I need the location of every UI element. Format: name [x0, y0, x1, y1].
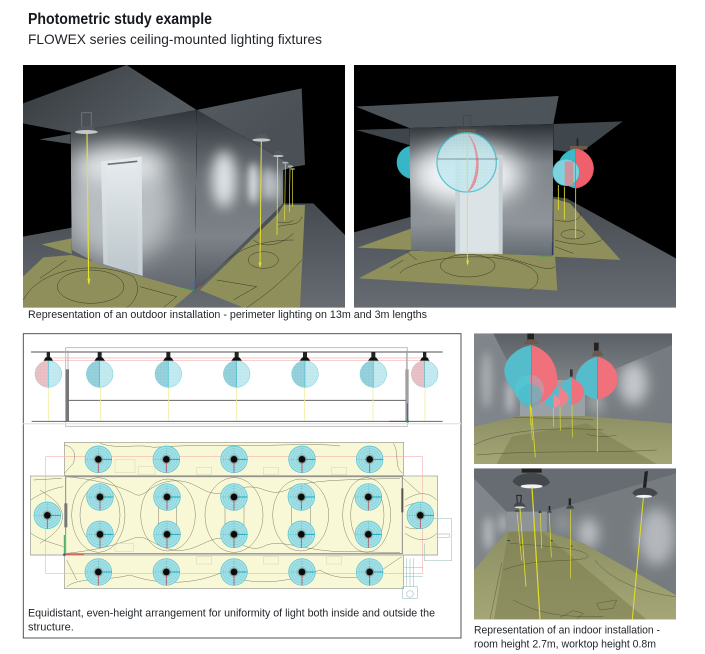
- ground: [23, 203, 345, 308]
- isolux contour lines: [31, 443, 437, 587]
- yellow light axes: [87, 133, 293, 285]
- yellow light axes: [530, 399, 597, 457]
- plan view: [30, 442, 452, 598]
- structure wall: [409, 124, 553, 256]
- olive floors: [357, 198, 621, 291]
- structure outline: [66, 477, 402, 554]
- luminaires: [513, 468, 658, 513]
- panel: plan and elevation diagram: [23, 334, 461, 638]
- panel: indoor render with photometric solids: [474, 333, 672, 464]
- photometric solids, right: [553, 138, 594, 188]
- door: [101, 157, 143, 276]
- right wall: [547, 473, 676, 595]
- ceiling: [474, 468, 676, 469]
- caption: arrangement note: Equidistant, even-height arrangement for uniformity of light both inside and outside the: [28, 608, 435, 620]
- caption: indoor installation: room height 2.7m, worktop height 0.8m: [474, 638, 656, 650]
- panel: outdoor render with photometric solids: [354, 65, 676, 308]
- ceiling: [494, 333, 672, 380]
- yellow light axes: [467, 135, 576, 264]
- wall, corner side: [65, 110, 197, 292]
- left wall: [474, 333, 520, 427]
- photometric solid, centre: [437, 133, 498, 192]
- photometric solids: [504, 333, 618, 408]
- panel: indoor render with luminaires: [474, 468, 676, 619]
- floor: [474, 532, 676, 619]
- table labels: [115, 459, 347, 564]
- axis gizmo: [63, 535, 66, 555]
- panel: outdoor render, corner view: [23, 65, 345, 308]
- luminaire: [457, 116, 476, 134]
- back wall: [520, 380, 587, 417]
- right wall: [585, 346, 670, 418]
- plan luminaire discs: [85, 446, 112, 473]
- axis gizmo: [194, 278, 196, 290]
- luminaires: [75, 113, 295, 170]
- fixture reference outline: [46, 457, 423, 573]
- subtitle: FLOWEX series ceiling-mounted lighting fixtures: [28, 31, 322, 47]
- door: [455, 155, 503, 254]
- left wall: [474, 478, 507, 570]
- yellow light axes: [517, 487, 643, 619]
- ceiling slabs: [356, 96, 559, 128]
- olive floor contours: [23, 205, 305, 308]
- elevation view: [23, 348, 461, 426]
- axis gizmo: [552, 242, 553, 256]
- caption: outdoor installation: Representation of an outdoor installation - perimeter lighting on 13m and 3m lengths: [28, 309, 427, 321]
- ceiling slab: [23, 65, 305, 167]
- wall, long side: [195, 110, 295, 292]
- floor: [474, 416, 672, 464]
- back wall: [507, 512, 550, 532]
- ground: [354, 197, 676, 308]
- side luminaire outline: [403, 519, 452, 598]
- caption: indoor installation: Representation of an indoor installation -: [474, 624, 660, 636]
- title: Photometric study example: [28, 11, 212, 28]
- far photometric sphere, left: [396, 146, 410, 179]
- caption: arrangement note: structure.: [28, 622, 74, 634]
